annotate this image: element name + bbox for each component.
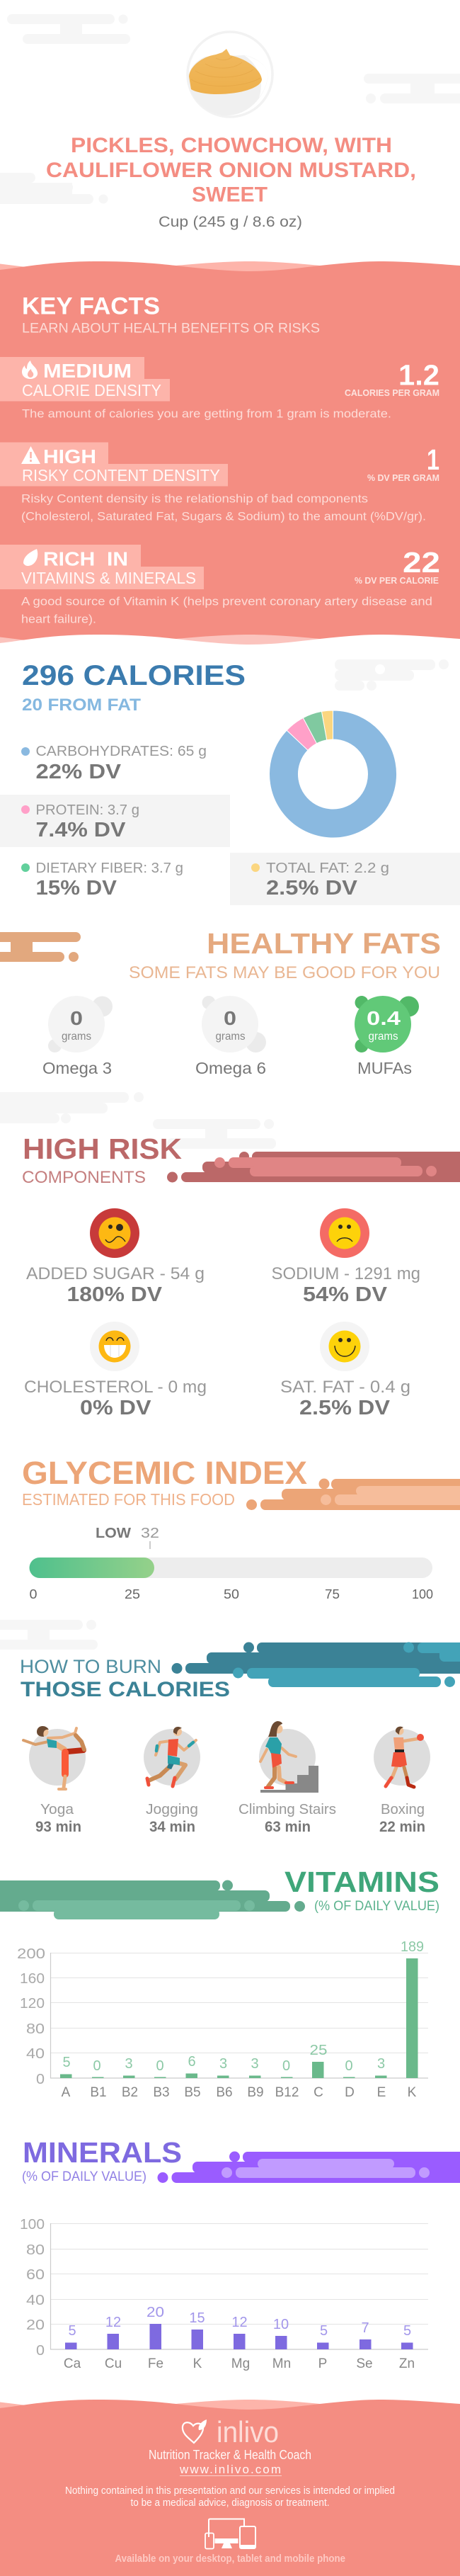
activity labels: 22 min — [379, 1819, 425, 1835]
decorative header shape: high risk — [167, 1152, 460, 1183]
bar chart: vitamins: 200 — [17, 1946, 45, 1962]
bar chart: vitamins: A — [62, 2085, 71, 2100]
sodium: SODIUM - 1291 mg — [272, 1264, 420, 1283]
disclaimer: Nothing contained in this presentation and our services is intended or implied — [65, 2485, 395, 2497]
omega 6: 0 — [224, 1007, 236, 1029]
disclaimer — [65, 2485, 395, 2509]
activity: boxing — [374, 1727, 430, 1787]
sat fat: 2.5% DV — [299, 1397, 391, 1419]
fact: risky content density: RISKY CONTENT DENSITY — [22, 466, 220, 484]
title: SWEET — [192, 183, 268, 207]
bar chart: minerals: 10 — [273, 2317, 289, 2332]
fact: vitamins and minerals: A good source of Vitamin K (helps prevent coronary artery disease and — [21, 595, 432, 608]
decorative clouds: header — [0, 14, 460, 204]
legend: dietary fiber — [21, 861, 183, 900]
heading: minerals: MINERALS — [23, 2136, 182, 2169]
bar chart: minerals: 0 — [36, 2343, 45, 2359]
bar chart: minerals: 15 — [189, 2310, 205, 2326]
logo: inlivo — [183, 2415, 279, 2449]
bar chart: minerals: Cu — [105, 2356, 122, 2371]
heading: high risk: COMPONENTS — [22, 1168, 146, 1187]
bar chart: vitamins: B9 — [247, 2085, 264, 2100]
mufas: MUFAs — [357, 1059, 412, 1077]
activity labels: 63 min — [265, 1819, 311, 1835]
bar chart: vitamins: 0 — [36, 2072, 45, 2087]
bar chart: vitamins: 0 — [156, 2058, 164, 2074]
bar chart: vitamins: 0 — [93, 2058, 101, 2074]
activity labels: Climbing Stairs — [238, 1802, 336, 1817]
decorative header shape: vitamins — [0, 1880, 305, 1919]
heading: high risk: HIGH RISK — [23, 1133, 182, 1165]
legend: dietary fiber: 15% DV — [35, 877, 117, 900]
fact: vitamins and minerals — [0, 545, 440, 626]
activity: jogging — [144, 1727, 200, 1786]
legend: carbohydrates: CARBOHYDRATES: 65 g — [35, 744, 207, 759]
omega 3: grams — [62, 1031, 91, 1043]
mufas — [355, 996, 419, 1077]
decorative header shape: healthy fats — [0, 932, 81, 962]
fact: vitamins and minerals: heart failure). — [21, 613, 96, 626]
marker: low 32 — [96, 1526, 159, 1549]
activity labels: Yoga — [40, 1802, 74, 1817]
heading: glycemic index: GLYCEMIC INDEX — [22, 1455, 307, 1491]
bar chart: vitamins: B1 — [90, 2085, 107, 2100]
omega 6: grams — [215, 1031, 245, 1043]
bar chart: vitamins: 5 — [62, 2055, 71, 2070]
fact: calorie density — [0, 357, 439, 421]
gauge scale — [30, 1587, 433, 1601]
legend: carbohydrates — [21, 744, 207, 783]
bar chart: minerals: 80 — [26, 2242, 45, 2258]
bar chart: vitamins: B5 — [184, 2085, 201, 2100]
fact: calorie density: The amount of calories you are getting from 1 gram is moderate. — [22, 408, 391, 421]
gauge scale: 0 — [30, 1587, 37, 1601]
heading: how to burn: HOW TO BURN — [20, 1656, 161, 1677]
legend: dietary fiber: DIETARY FIBER: 3.7 g — [35, 861, 183, 876]
legend: total fat: 2.5% DV — [266, 877, 358, 900]
icon: flame — [22, 361, 38, 379]
heading: vitamins: (% OF DAILY VALUE) — [314, 1899, 439, 1914]
activity: climbing stairs — [259, 1721, 318, 1793]
title: PICKLES, CHOWCHOW, WITH — [71, 134, 392, 157]
bar chart: vitamins: 3 — [125, 2056, 133, 2072]
panel: vitamins — [0, 1866, 439, 2100]
legend: protein: PROTEIN: 3.7 g — [35, 802, 139, 818]
heading: calories: 296 CALORIES — [22, 660, 246, 691]
legend: total fat — [251, 861, 389, 900]
panel: glycemic index — [22, 1455, 460, 1601]
bar chart: minerals: 5 — [68, 2323, 76, 2339]
sat fat — [280, 1322, 410, 1419]
mufas: grams — [368, 1031, 398, 1043]
bar chart: vitamins: 0 — [282, 2058, 290, 2074]
mufas: 0.4 — [367, 1007, 401, 1029]
tagline: Nutrition Tracker & Health Coach — [149, 2447, 311, 2462]
fact: calorie density: MEDIUM — [43, 360, 132, 382]
heading: calories — [22, 660, 246, 715]
bar chart: vitamins: 3 — [377, 2056, 385, 2072]
fact: risky content density: HIGH — [43, 446, 96, 467]
fact: vitamins and minerals: % DV PER CALORIE — [355, 575, 439, 586]
bar chart: minerals: 20 — [26, 2317, 45, 2333]
bar chart: minerals: 20 — [146, 2305, 164, 2320]
heading: healthy fats: HEALTHY FATS — [207, 927, 441, 960]
decorative cloud: calories — [335, 659, 449, 691]
bar chart: minerals: 40 — [26, 2293, 45, 2308]
heading: minerals: (% OF DAILY VALUE) — [22, 2169, 146, 2184]
gauge scale: 100 — [412, 1587, 433, 1601]
bar chart: vitamins: 40 — [26, 2046, 45, 2062]
bar chart: minerals: 100 — [20, 2217, 45, 2232]
bar chart: vitamins: 3 — [219, 2056, 227, 2072]
marker: low 32: 32 — [141, 1526, 159, 1541]
fact: risky content density: % DV PER GRAM — [367, 472, 439, 483]
heading: key facts: LEARN ABOUT HEALTH BENEFITS OR RISKS — [22, 320, 320, 336]
fact: vitamins and minerals: 22 — [403, 546, 440, 579]
heading: how to burn: THOSE CALORIES — [21, 1678, 230, 1701]
bar chart: minerals: 5 — [320, 2323, 328, 2339]
fact: vitamins and minerals: VITAMINS & MINERALS — [21, 569, 196, 587]
panel: minerals — [20, 2136, 460, 2371]
sat fat: SAT. FAT - 0.4 g — [280, 1378, 410, 1397]
gauge scale: 75 — [325, 1587, 340, 1601]
bar chart: vitamins: D — [345, 2085, 355, 2100]
heading: healthy fats — [129, 927, 441, 982]
omega 3 — [42, 996, 113, 1077]
heading: glycemic index: ESTIMATED FOR THIS FOOD — [22, 1490, 235, 1509]
heading: minerals — [22, 2136, 182, 2184]
bar chart: minerals: Fe — [148, 2356, 163, 2371]
fact: risky content density: (Cholesterol, Saturated Fat, Sugars & Sodium) to the amount (%DV/gr). — [21, 510, 426, 523]
bar chart: minerals: K — [193, 2356, 202, 2371]
bar chart: vitamins: C — [314, 2085, 323, 2100]
bar chart: vitamins: 189 — [401, 1939, 424, 1955]
fact: risky content density: 1 — [427, 443, 439, 476]
bar chart: minerals — [20, 2217, 428, 2371]
legend: total fat: TOTAL FAT: 2.2 g — [266, 861, 389, 876]
omega 3: Omega 3 — [42, 1059, 112, 1077]
heading: key facts: KEY FACTS — [22, 293, 160, 320]
bar chart: vitamins: B2 — [122, 2085, 138, 2100]
decorative header shape: burn — [171, 1642, 460, 1687]
fact: calorie density: 1.2 — [398, 358, 439, 391]
bar chart: minerals: 12 — [231, 2315, 248, 2330]
panel: footer — [0, 2400, 460, 2576]
added sugar: ADDED SUGAR - 54 g — [26, 1264, 205, 1283]
sodium — [272, 1208, 420, 1306]
serving size: Cup (245 g / 8.6 oz) — [159, 214, 302, 230]
omega 3: 0 — [70, 1007, 83, 1029]
cholesterol: 0% DV — [80, 1397, 151, 1419]
gauge bar — [30, 1557, 432, 1578]
activity labels: Jogging — [146, 1802, 198, 1817]
bar chart: vitamins: B3 — [153, 2085, 170, 2100]
donut chart — [270, 710, 397, 838]
heading: healthy fats: SOME FATS MAY BE GOOD FOR YOU — [129, 963, 440, 982]
bar chart: vitamins: B6 — [216, 2085, 233, 2100]
panel: calories — [0, 660, 460, 905]
bar chart: minerals: Zn — [399, 2356, 415, 2371]
bar chart: minerals: 5 — [403, 2323, 411, 2339]
gauge scale: 25 — [125, 1587, 140, 1601]
heading: calories: 20 FROM FAT — [22, 696, 141, 715]
bar chart: minerals: 60 — [26, 2267, 45, 2283]
icon: leaf — [23, 549, 38, 566]
bar chart: vitamins: K — [408, 2085, 417, 2100]
bar chart: vitamins — [17, 1939, 428, 2100]
title: CAULIFLOWER ONION MUSTARD, — [46, 159, 416, 182]
disclaimer: to be a medical advice, diagnosis or treatment. — [130, 2497, 330, 2509]
marker: low 32: LOW — [96, 1526, 131, 1541]
bar chart: vitamins: 0 — [345, 2058, 353, 2074]
bar chart: vitamins: B12 — [275, 2085, 299, 2100]
activity: yoga — [23, 1726, 86, 1789]
bar chart: vitamins: E — [377, 2085, 386, 2100]
panel: how to burn — [20, 1642, 460, 1835]
panel: healthy fats — [0, 927, 441, 1077]
bar chart: minerals: 7 — [361, 2320, 369, 2336]
bar chart: vitamins: 6 — [188, 2054, 196, 2070]
cholesterol: CHOLESTEROL - 0 mg — [24, 1378, 207, 1397]
decorative header shape: minerals — [157, 2152, 460, 2183]
fact: risky content density — [0, 442, 439, 523]
bar chart: minerals: Se — [356, 2356, 373, 2371]
bar chart: vitamins: 3 — [251, 2056, 259, 2072]
bar chart: minerals: 12 — [105, 2315, 121, 2330]
decorative clouds: below healthy fats — [0, 1092, 276, 1149]
legend: carbohydrates: 22% DV — [35, 761, 122, 783]
activity labels: 93 min — [35, 1819, 81, 1835]
title — [46, 134, 416, 207]
fact: vitamins and minerals: RICH IN — [43, 548, 128, 569]
bar chart: minerals: P — [318, 2356, 327, 2371]
heading: glycemic index — [22, 1455, 307, 1509]
cholesterol — [24, 1322, 207, 1419]
heading: high risk — [22, 1133, 182, 1187]
icon: mustard bowl — [188, 32, 272, 117]
legend backgrounds — [0, 795, 460, 905]
icon: warning — [21, 446, 40, 464]
logo: inlivo: inlivo — [217, 2415, 279, 2449]
heading: key facts — [22, 293, 320, 336]
heading: how to burn — [20, 1656, 230, 1701]
fact: calorie density: CALORIE DENSITY — [22, 381, 161, 399]
sodium: 54% DV — [303, 1283, 388, 1306]
bar chart: vitamins: 120 — [20, 1996, 45, 2012]
website link: www.inlivo.com — [179, 2463, 281, 2476]
bar chart: vitamins: 160 — [20, 1971, 45, 1987]
decorative cloud: above burn — [0, 1620, 98, 1650]
omega 6 — [195, 996, 266, 1077]
gauge scale: 50 — [224, 1587, 239, 1601]
legend: protein: 7.4% DV — [35, 819, 126, 841]
bar chart: vitamins: 25 — [310, 2043, 327, 2058]
availability note: Available on your desktop, tablet and mobile phone — [115, 2553, 345, 2565]
decorative header shape: glycemic index — [246, 1479, 460, 1510]
activity labels: Boxing — [381, 1802, 425, 1817]
fact: calorie density: CALORIES PER GRAM — [345, 387, 439, 398]
heading: vitamins — [284, 1866, 439, 1914]
activity labels — [35, 1802, 425, 1835]
icon: devices — [205, 2519, 255, 2548]
panel: key facts — [0, 261, 460, 657]
bar chart: minerals: Mg — [231, 2356, 250, 2371]
legend: protein — [21, 802, 139, 841]
activity labels: 34 min — [149, 1819, 195, 1835]
heading: vitamins: VITAMINS — [284, 1866, 439, 1898]
bar chart: vitamins: 80 — [26, 2021, 45, 2037]
panel: high risk — [22, 1133, 460, 1419]
added sugar: 180% DV — [67, 1283, 163, 1306]
fact: risky content density: Risky Content density is the relationship of bad components — [21, 493, 368, 506]
added sugar — [26, 1208, 205, 1306]
bar chart: minerals: Mn — [272, 2356, 291, 2371]
bar chart: minerals: Ca — [64, 2356, 81, 2371]
omega 6: Omega 6 — [195, 1059, 266, 1077]
